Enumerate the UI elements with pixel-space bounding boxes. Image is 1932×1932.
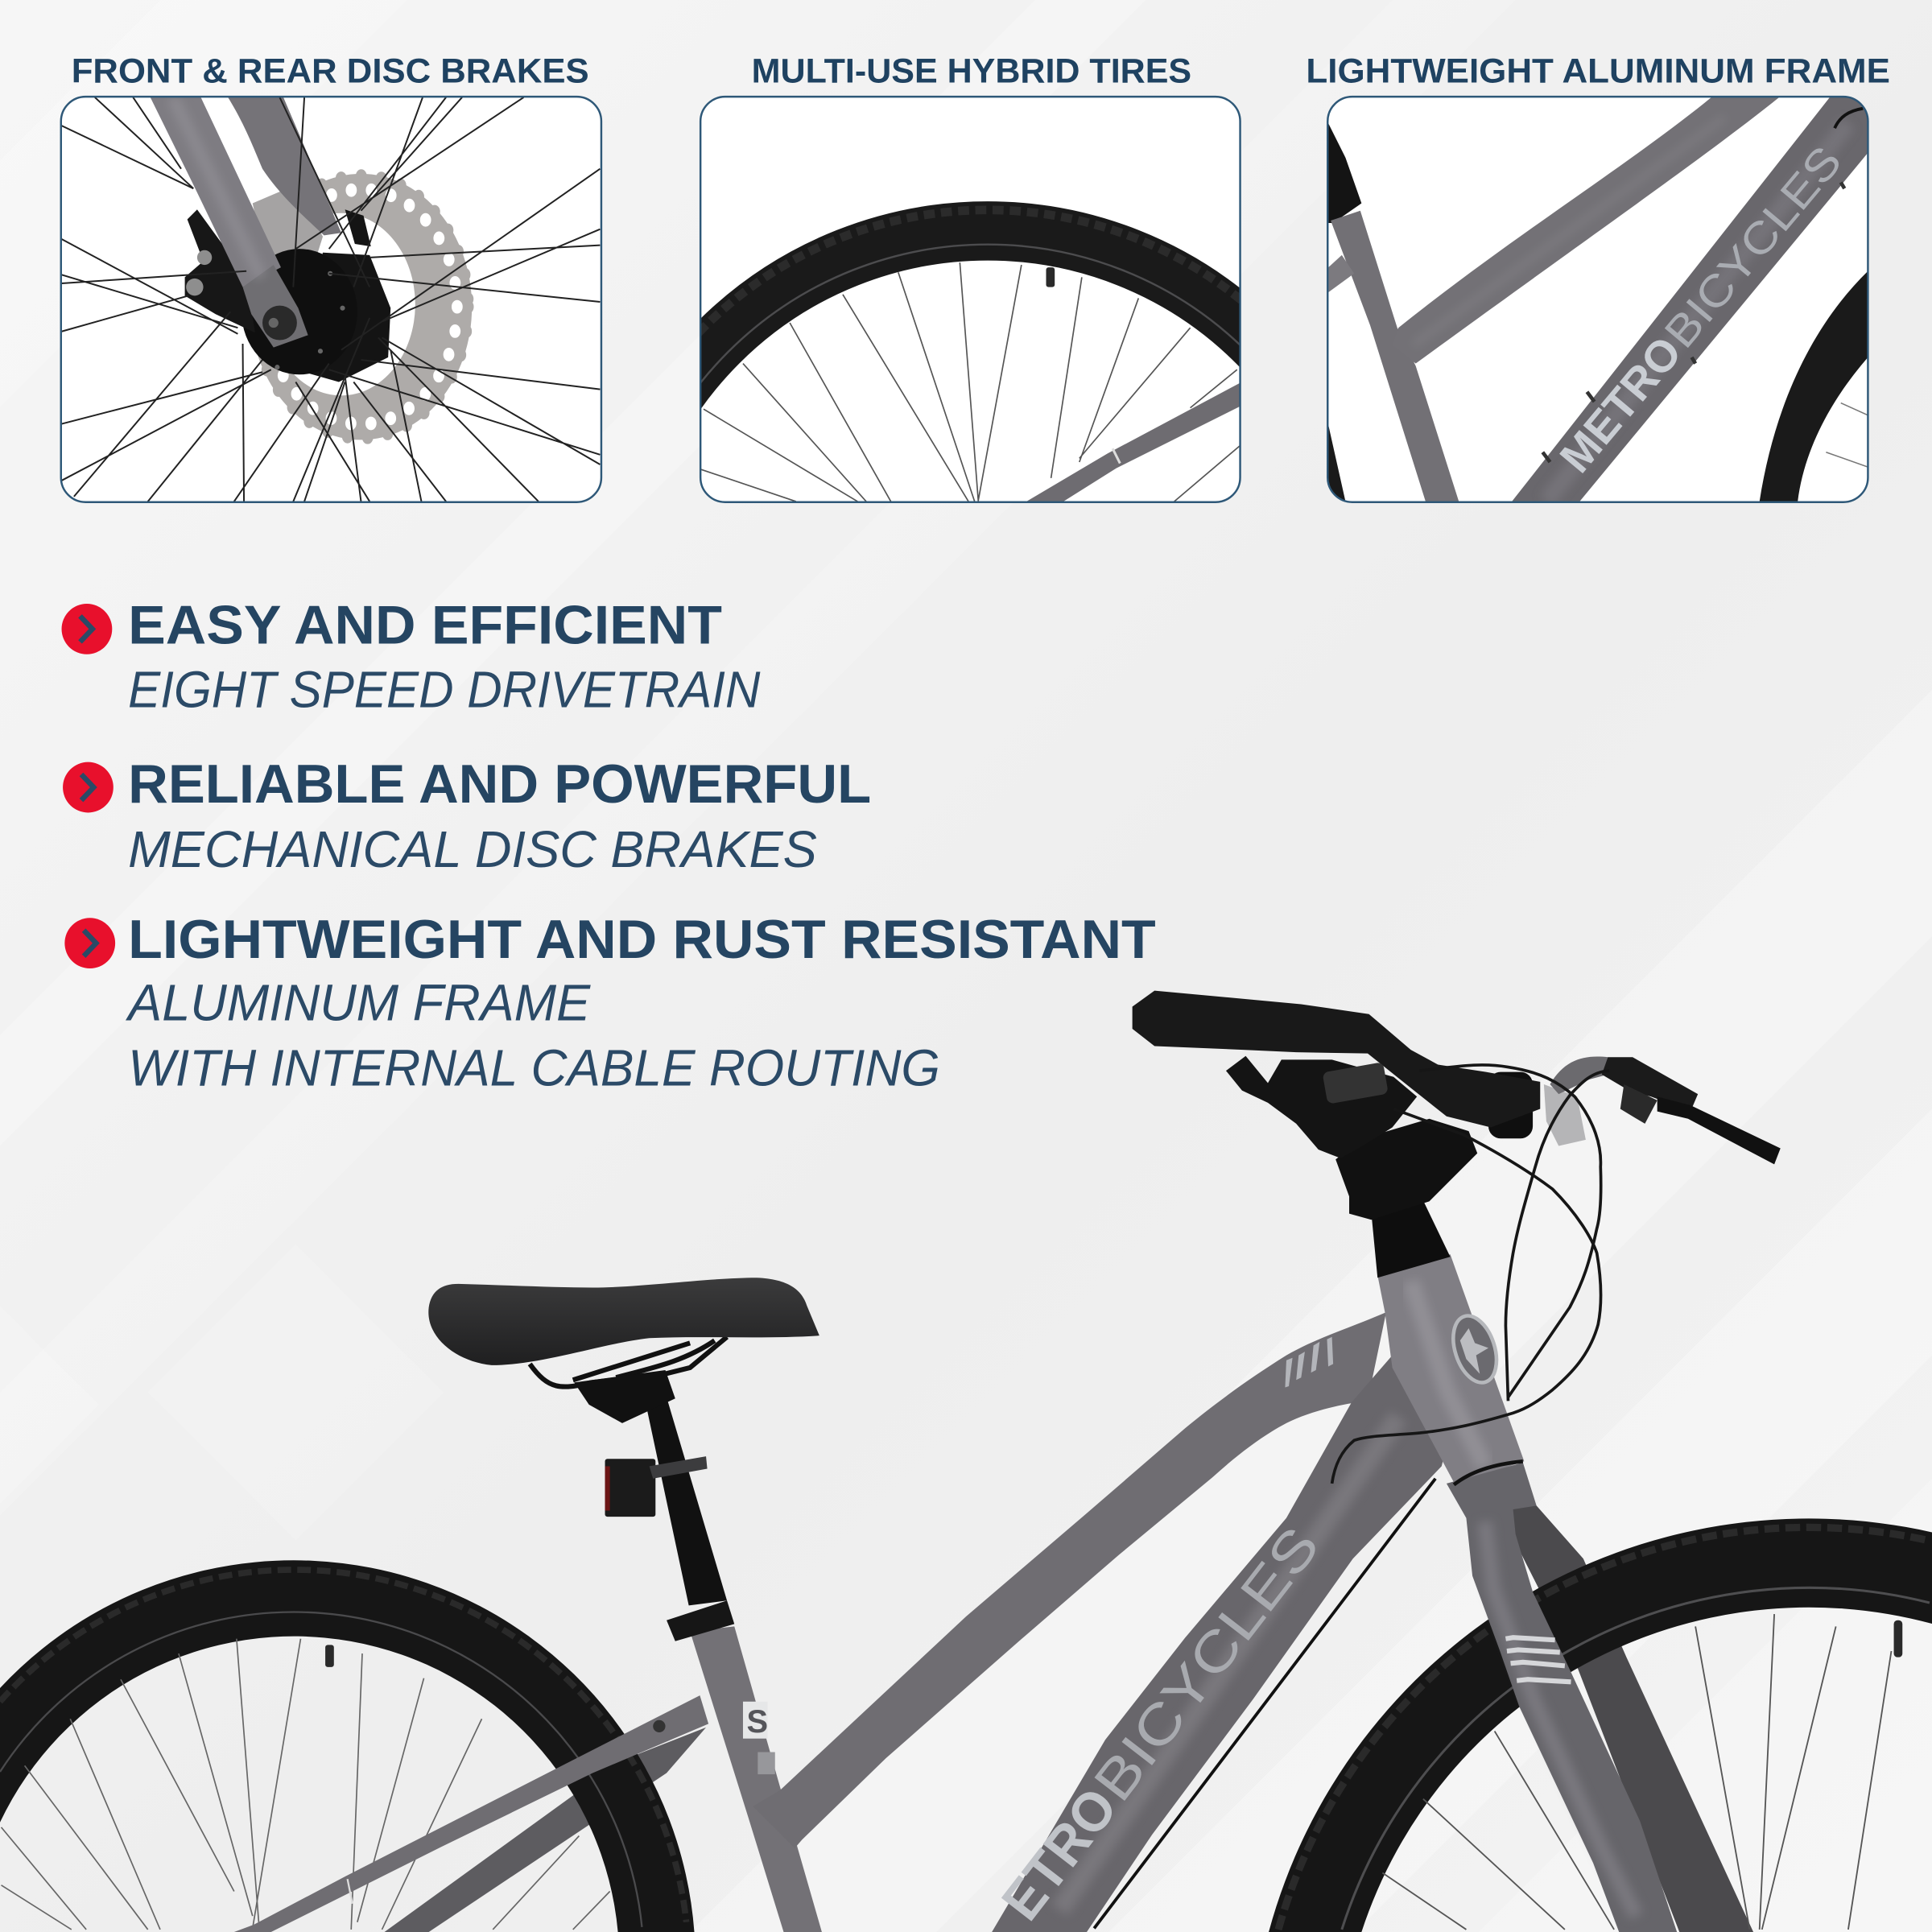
top tube stripes bbox=[1285, 1337, 1333, 1387]
stem bbox=[1335, 1119, 1477, 1220]
down tube logo: ETRO bbox=[990, 1777, 1129, 1931]
brake and shift cables bbox=[1332, 1065, 1609, 1484]
panel: disc brake photo bbox=[61, 97, 601, 502]
collar ring bbox=[1454, 1461, 1523, 1484]
frame stay bbox=[1026, 383, 1240, 502]
label: front and rear disc brakes: FRONT & REAR DISC BRAKES bbox=[72, 52, 589, 91]
spokes bbox=[62, 97, 600, 502]
front reflector bbox=[1544, 1084, 1586, 1146]
subheading 3 line 2: WITH INTERNAL CABLE ROUTING bbox=[128, 1038, 940, 1096]
head badge bbox=[1446, 1311, 1505, 1388]
seat post bbox=[1327, 121, 1361, 223]
seat clamp bbox=[667, 1600, 734, 1641]
feature 2 bbox=[63, 754, 871, 878]
cable and spokes bbox=[1835, 109, 1863, 128]
top tube bbox=[753, 1312, 1386, 1848]
panel: hybrid tire photo bbox=[699, 95, 1241, 503]
logo on down tube: BICYCLES bbox=[1654, 136, 1852, 357]
seat tube sticker: S bbox=[747, 1704, 768, 1740]
seat tube bbox=[690, 1626, 822, 1932]
rear wheel bbox=[0, 1560, 694, 1932]
rear tire sliver bbox=[1327, 419, 1345, 502]
seat tube sticker bbox=[743, 1702, 775, 1774]
fork front leg bbox=[151, 97, 308, 348]
label: lightweight aluminum frame: LIGHTWEIGHT ALUMINUM FRAME bbox=[1306, 52, 1890, 91]
brake caliper bbox=[185, 209, 245, 327]
top tube bbox=[1393, 97, 1779, 364]
heading 2: RELIABLE AND POWERFUL bbox=[128, 754, 871, 815]
down tube bbox=[992, 1356, 1460, 1932]
fork back leg bbox=[1511, 1497, 1753, 1932]
upper seat stay bbox=[234, 1695, 708, 1932]
fork rear leg bbox=[228, 97, 341, 235]
bullet icon 1 bbox=[62, 604, 112, 654]
spokes bbox=[701, 262, 1240, 502]
headset bbox=[1372, 1193, 1451, 1278]
head tube bbox=[1377, 1254, 1524, 1484]
valve bbox=[1046, 267, 1055, 287]
down tube bbox=[1512, 97, 1868, 502]
hub body bbox=[242, 209, 390, 382]
brake cable under down tube bbox=[1094, 1479, 1435, 1928]
saddle bbox=[428, 1278, 819, 1365]
panel: aluminum frame photo bbox=[1327, 97, 1868, 502]
saddle rails and clamp bbox=[530, 1337, 727, 1423]
label: multi-use hybrid tires: MULTI-USE HYBRID TIRES bbox=[752, 52, 1191, 91]
fork crown and front leg bbox=[1447, 1463, 1677, 1932]
tire bbox=[701, 201, 1240, 409]
front tire bbox=[1760, 271, 1868, 502]
seat tube bbox=[1331, 211, 1459, 502]
feature 1 bbox=[62, 596, 761, 719]
heading 1: EASY AND EFFICIENT bbox=[128, 596, 722, 656]
logo on down tube: METRO bbox=[1550, 327, 1691, 482]
lower chain stay bbox=[385, 1728, 706, 1932]
bottle bosses bbox=[1542, 183, 1844, 462]
subheading 1: EIGHT SPEED DRIVETRAIN bbox=[128, 661, 761, 719]
handlebar right side bbox=[1550, 1057, 1781, 1164]
disc rotor bbox=[250, 174, 472, 440]
logo on down tube bbox=[1550, 136, 1852, 482]
feature 3 bbox=[64, 910, 1156, 1096]
subheading 2: MECHANICAL DISC BRAKES bbox=[128, 820, 817, 878]
seat post bbox=[645, 1397, 727, 1605]
bicycle bbox=[0, 991, 1932, 1932]
front wheel bbox=[1269, 1518, 1932, 1932]
down tube logo bbox=[990, 1515, 1331, 1931]
down tube logo: BICYCLES bbox=[1082, 1515, 1331, 1813]
handlebar and left grip bbox=[1133, 991, 1540, 1158]
rear light bbox=[605, 1456, 708, 1517]
bullet icon 2 bbox=[63, 762, 114, 812]
subheading 3 line 1: ALUMINUM FRAME bbox=[125, 973, 591, 1031]
heading 3: LIGHTWEIGHT AND RUST RESISTANT bbox=[128, 910, 1156, 970]
bullet icon 3 bbox=[64, 918, 115, 968]
bar clamp bbox=[1488, 1072, 1533, 1138]
